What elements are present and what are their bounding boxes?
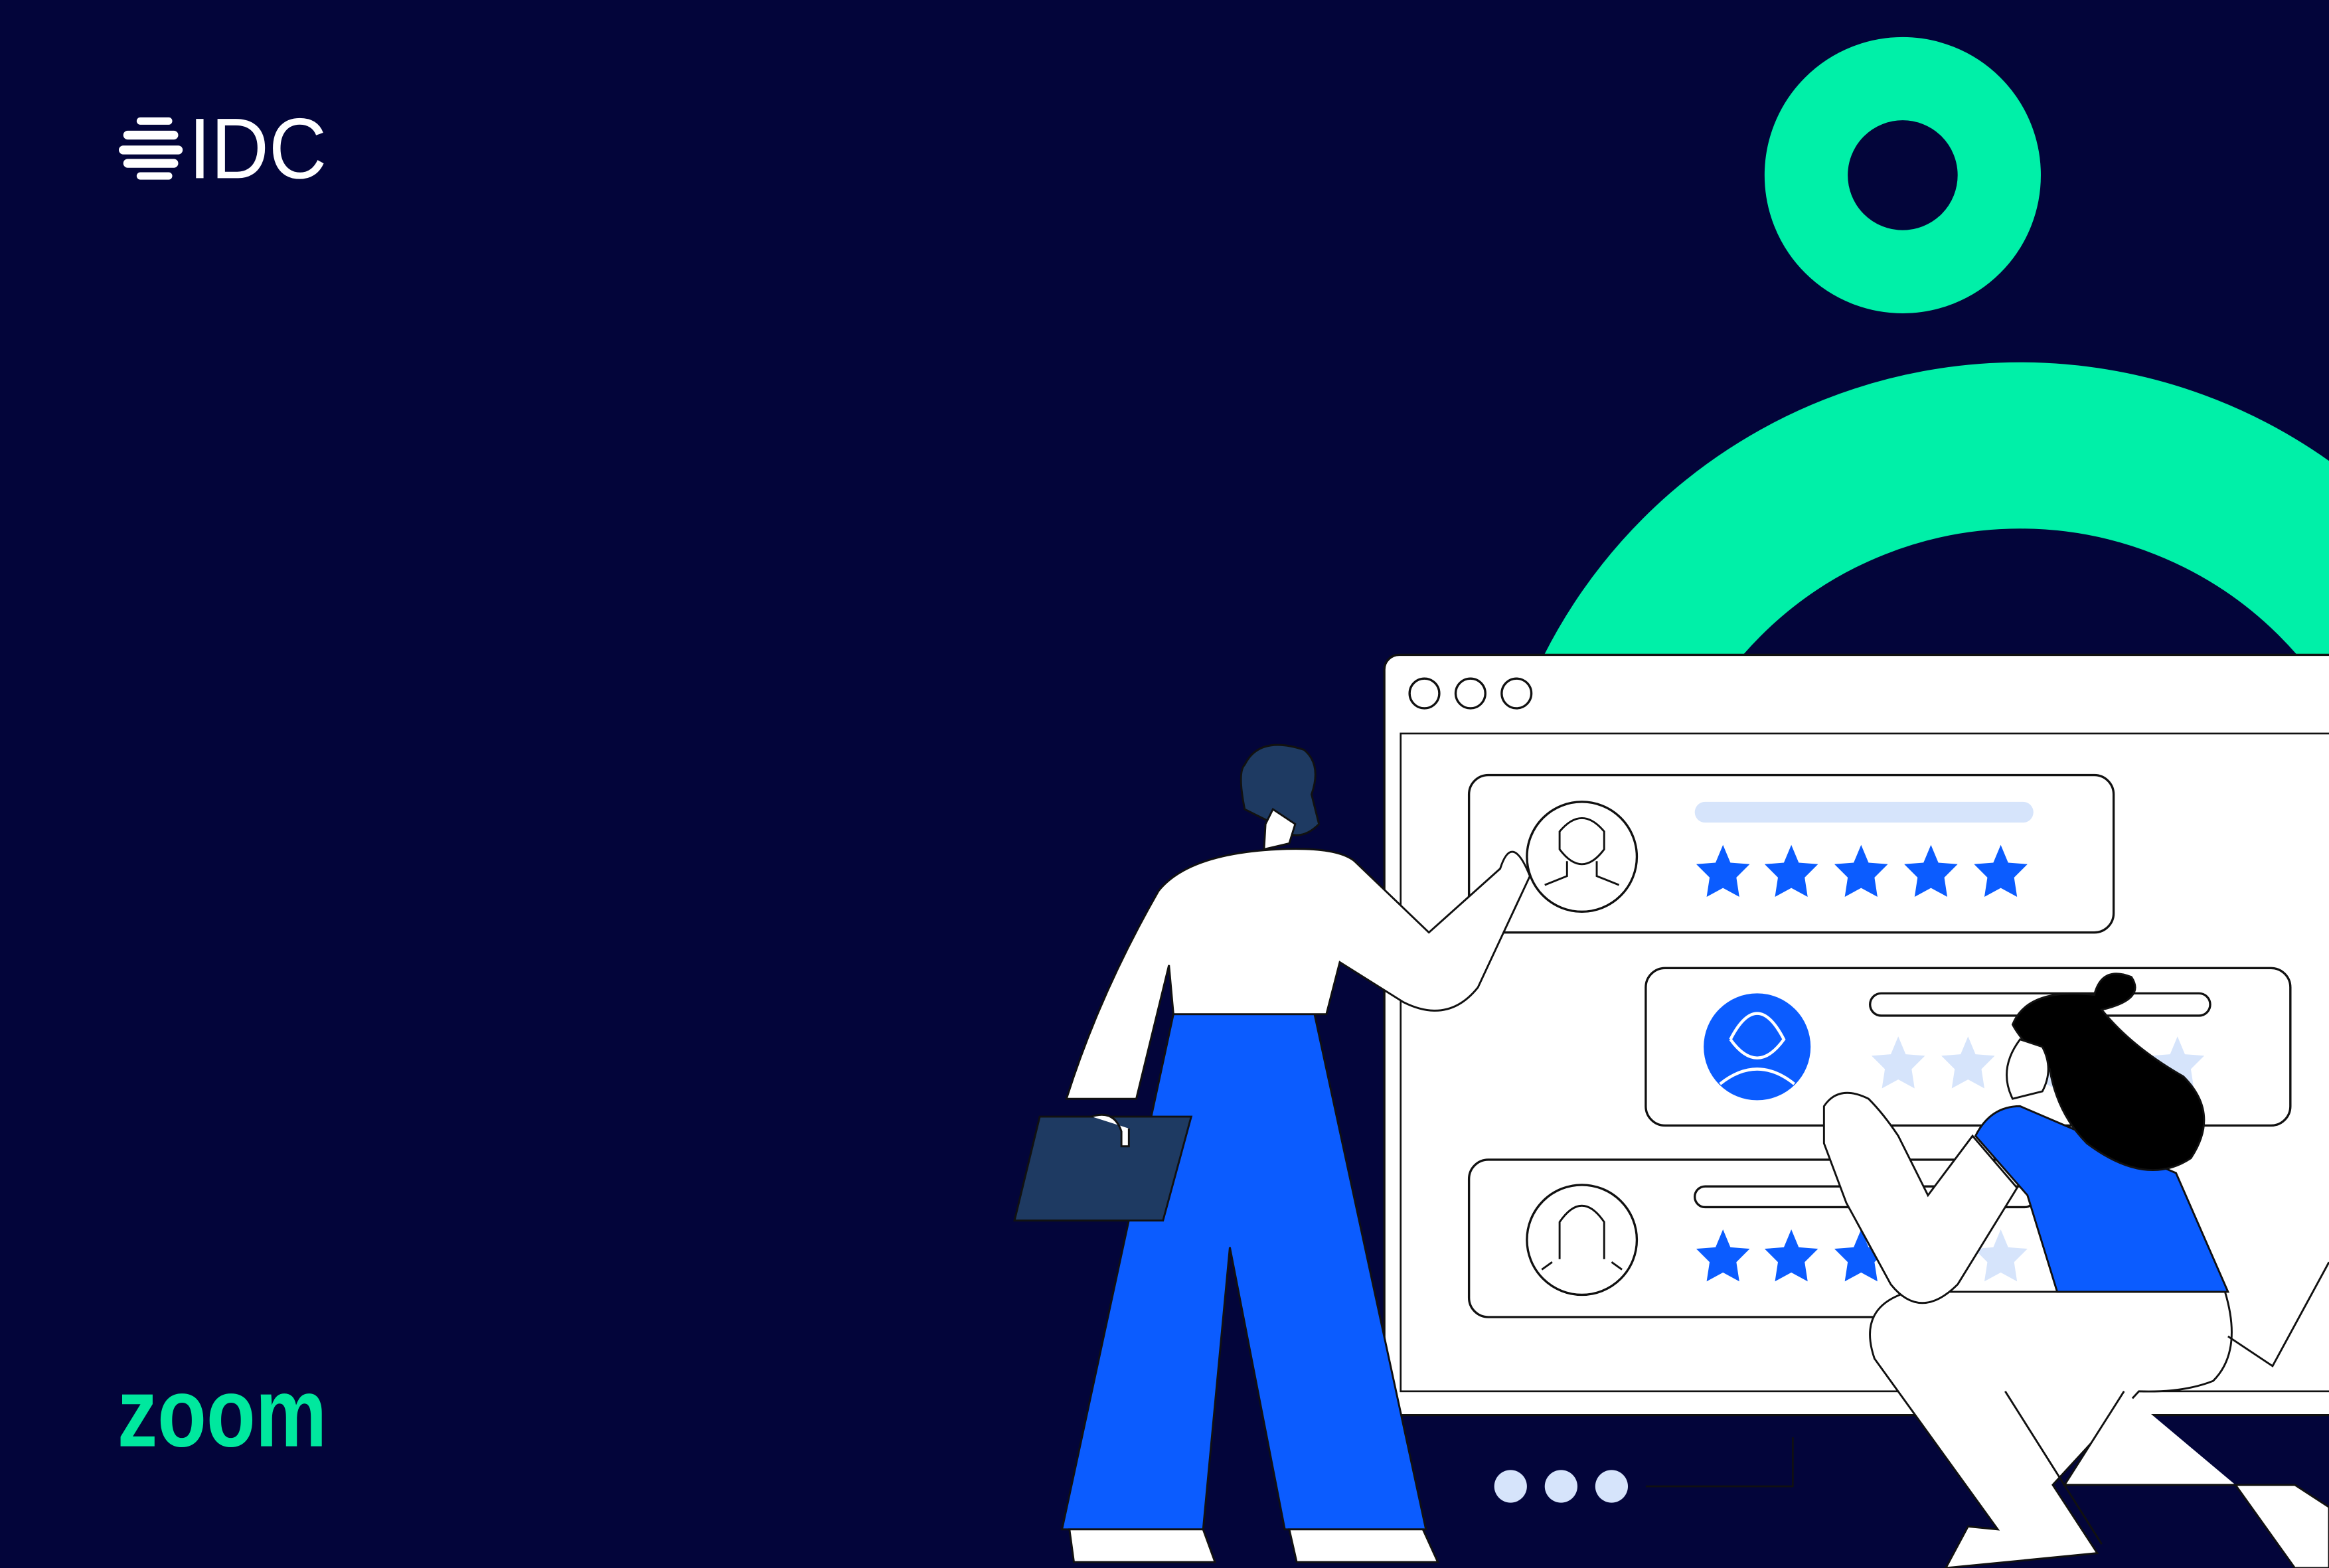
figure: woman	[1824, 974, 2329, 1568]
logo: IDC: IDC	[189, 101, 327, 196]
logo: zoom: zoom	[118, 1358, 327, 1468]
browser window	[1384, 655, 2329, 1415]
card: review 2	[1646, 968, 2290, 1125]
decoration: green arc	[1544, 362, 2329, 654]
decoration: green ring	[1806, 79, 1999, 272]
logo: IDC	[119, 101, 327, 196]
card: review 3	[1469, 1160, 2114, 1317]
pagination dots	[1494, 1437, 1793, 1503]
card: review 1	[1469, 775, 2114, 933]
figure: man	[1014, 745, 1530, 1562]
